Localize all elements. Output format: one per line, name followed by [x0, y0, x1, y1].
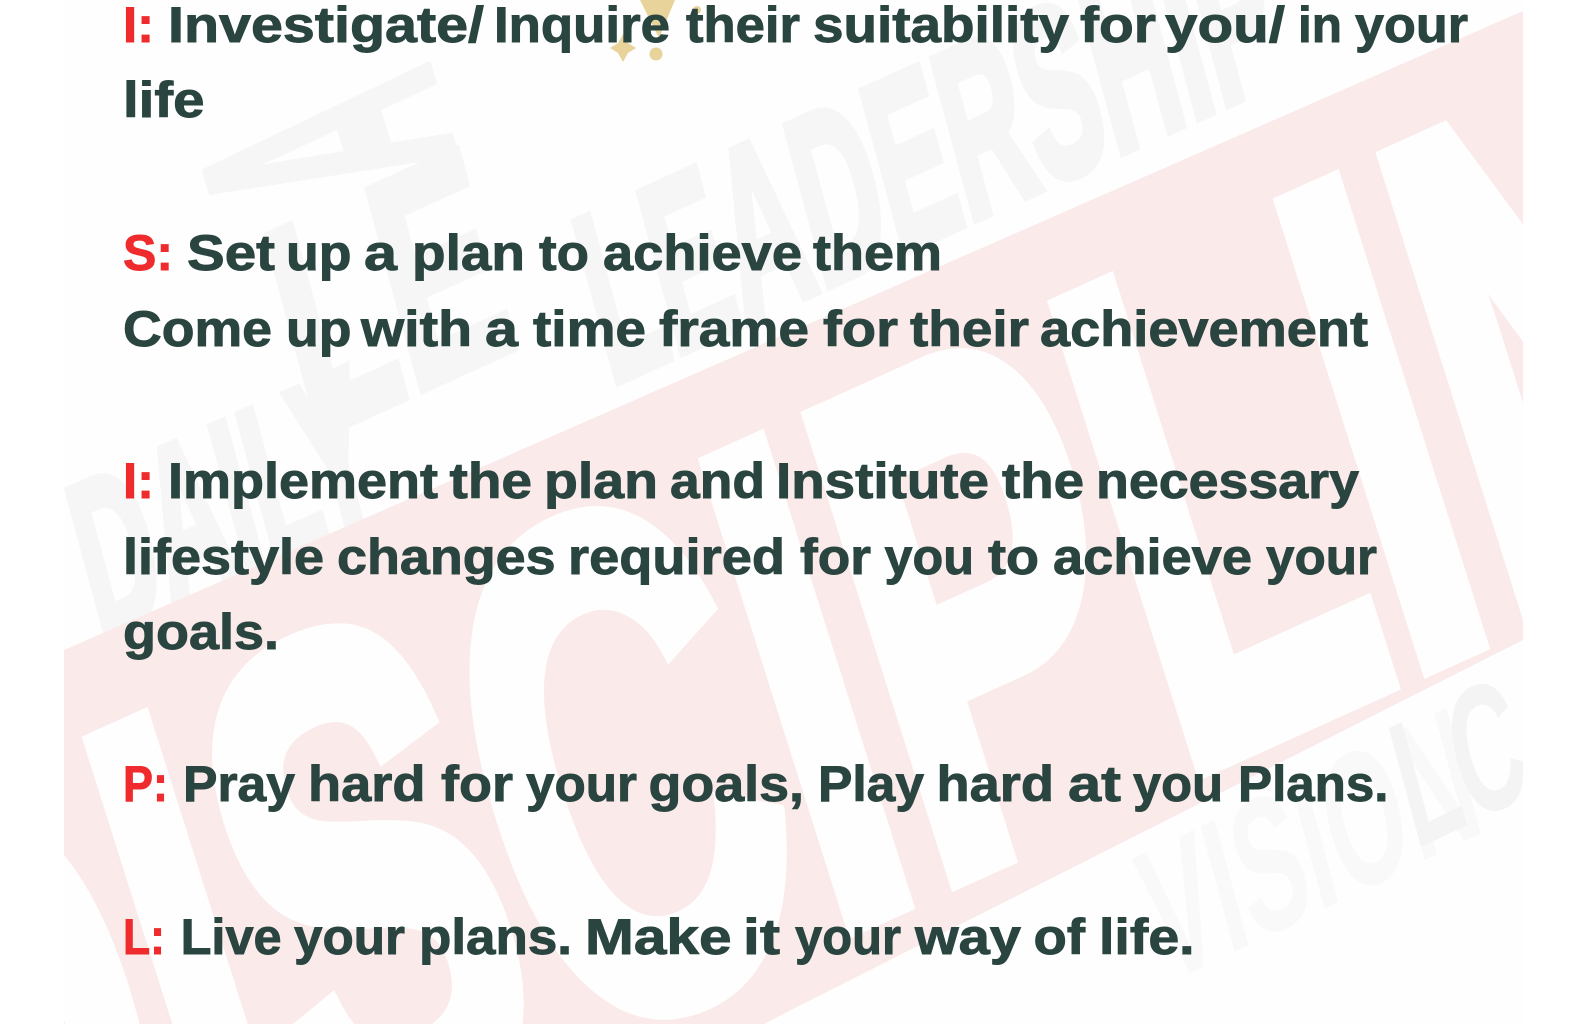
watermark: grey large letters upper left: DAILY: [48, 321, 400, 685]
watermark: grey large letters upper left: A: [124, 39, 527, 251]
text block: P pray hard: goals,: [648, 756, 804, 812]
text block: I implement the plan: [123, 453, 1377, 660]
text block: P pray hard: P:: [123, 756, 168, 812]
text block: S set up a plan: up: [286, 301, 352, 357]
watermark: grey large letters upper left: LE: [240, 85, 538, 502]
text block: L live your plans: it: [743, 909, 780, 965]
text block: S set up a plan: achievement: [1040, 301, 1368, 357]
icon: gold sparkle decoration: [610, 0, 701, 62]
text block: I implement the plan: necessary: [1096, 453, 1359, 509]
text block: I implement the plan: lifestyle: [123, 529, 324, 585]
text block: S set up a plan: achieve: [603, 225, 802, 281]
text block: S set up a plan: plan: [412, 225, 525, 281]
text block: S set up a plan: with: [360, 301, 472, 357]
text block: L live your plans: way: [914, 909, 1021, 965]
watermark: grey vision word lower right: LC: [1373, 636, 1545, 887]
text block: L live your plans: Make: [585, 909, 732, 965]
text block: I implement the plan: plan: [544, 453, 658, 509]
text block: S set up a plan: [123, 225, 1368, 357]
text block: I implement the plan: and: [670, 453, 765, 509]
text block: S set up a plan: their: [910, 301, 1029, 357]
text block: I implement the plan: I:: [123, 453, 154, 509]
text block: I implement the plan: you: [884, 529, 974, 585]
text block: P pray hard: your: [526, 756, 637, 812]
text block: S set up a plan: Come: [123, 301, 272, 357]
text block: S set up a plan: a: [364, 225, 398, 281]
text block: I implement the plan: the: [450, 453, 532, 509]
text block: L live your plans: of: [1034, 909, 1085, 965]
text block: L live your plans: Live: [181, 909, 282, 965]
text block: I implement the plan: your: [1266, 529, 1377, 585]
text block: L live your plans: life.: [1099, 909, 1195, 965]
text block: L live your plans: L:: [123, 909, 165, 965]
watermark: grey vision word lower right: VISION: [1121, 667, 1498, 1024]
text block: I implement the plan: Institute: [776, 453, 989, 509]
text block: S set up a plan: frame: [659, 301, 809, 357]
text block: S set up a plan: up: [286, 225, 352, 281]
text block: S set up a plan: to: [539, 225, 589, 281]
text block: I implement the plan: Implement: [168, 453, 438, 509]
text block: I implement the plan: achieve: [1053, 529, 1252, 585]
text block: I investigate: life: [123, 72, 204, 128]
text block: I implement the plan: for: [800, 529, 871, 585]
text block: I implement the plan: changes: [337, 529, 556, 585]
text block: P pray hard: for: [441, 756, 513, 812]
text block: P pray hard: [123, 756, 1388, 812]
text block: L live your plans: plans.: [419, 909, 572, 965]
text block: I investigate: [123, 0, 1468, 128]
text block: S set up a plan: them: [813, 225, 942, 281]
text block: P pray hard: hard: [308, 756, 426, 812]
text block: S set up a plan: a: [485, 301, 519, 357]
text block: P pray hard: Play: [818, 756, 924, 812]
text block: P pray hard: at: [1068, 756, 1121, 812]
text block: L live your plans: your: [795, 909, 901, 965]
watermark: grey large letters upper left: [48, 39, 538, 685]
text block: I implement the plan: required: [568, 529, 785, 585]
text block: L live your plans: your: [294, 909, 405, 965]
text block: I implement the plan: goals.: [123, 604, 279, 660]
text block: S set up a plan: for: [823, 301, 898, 357]
text block: P pray hard: Pray: [183, 756, 295, 812]
text block: P pray hard: hard: [936, 756, 1054, 812]
text block: I implement the plan: to: [988, 529, 1039, 585]
text block: S set up a plan: Set: [187, 225, 275, 281]
text block: I implement the plan: the: [1002, 453, 1084, 509]
text block: P pray hard: Plans.: [1238, 756, 1388, 812]
text block: S set up a plan: S:: [123, 225, 173, 281]
text block: P pray hard: you: [1133, 756, 1223, 812]
text block: S set up a plan: time: [533, 301, 646, 357]
text block: L live your plans: [123, 909, 1195, 965]
